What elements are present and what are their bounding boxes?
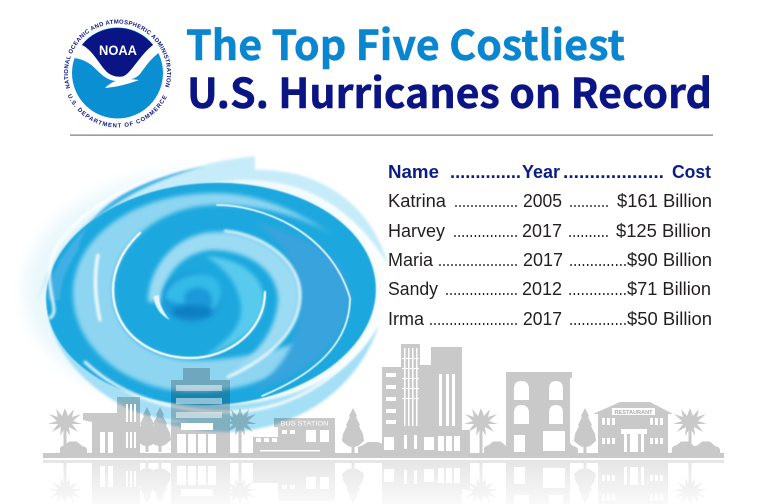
row: Katrina: $161 Billion (617, 191, 712, 211)
row: Sandy: .................. (445, 279, 518, 299)
hurricane swirl (25, 156, 388, 432)
NOAA logo: NOAA (99, 42, 137, 58)
title: The Top Five Costliest (186, 12, 625, 72)
table header: Cost (672, 162, 711, 182)
title: U.S. Hurricanes on Record (187, 60, 712, 120)
divider (70, 134, 713, 136)
row: Maria: Maria (388, 250, 434, 270)
city skyline (43, 344, 724, 458)
row: Sandy: Sandy (388, 279, 438, 299)
skyline windows (100, 348, 663, 453)
swirl eye (154, 273, 222, 323)
row: Harvey (388, 221, 711, 241)
row: Harvey: ................ (453, 221, 518, 241)
swirl: main body (40, 175, 382, 413)
row: Katrina: .......... (569, 191, 609, 211)
NOAA logo (64, 20, 172, 128)
table header: .............. (450, 162, 521, 182)
row: Sandy: .............. (568, 279, 627, 299)
bus station sign: BUS STATION (280, 420, 329, 428)
swirl: soft halo (25, 172, 375, 408)
table header: Year (522, 162, 560, 182)
row: Katrina: ................ (454, 191, 518, 211)
NOAA logo: NATIONAL OCEANIC AND ATMOSPHERIC ADMINISTRATION (64, 20, 172, 89)
row: Harvey: .......... (568, 221, 609, 241)
swirl: outer arms (30, 156, 388, 432)
row: Sandy: $71 Billion (627, 279, 711, 299)
swirl: pale inner band (148, 232, 300, 378)
row: Maria: .............. (569, 250, 627, 270)
row: Irma: 2017 (523, 309, 562, 329)
row: Irma: ...................... (429, 309, 518, 329)
row: Irma: .............. (569, 309, 627, 329)
restaurant sign: RESTAURANT (614, 410, 653, 416)
row: Irma: $50 Billion (627, 309, 712, 329)
skyline reflection (43, 460, 724, 497)
row: Sandy (388, 279, 711, 299)
row: Maria: .................... (438, 250, 518, 270)
row: Katrina (388, 191, 712, 211)
row: Harvey: $125 Billion (616, 221, 711, 241)
row: Maria (388, 250, 712, 270)
row: Katrina: Katrina (388, 191, 447, 211)
NOAA logo: U.S. DEPARTMENT OF COMMERCE (68, 94, 167, 128)
swirl: upper-left rim (47, 166, 205, 300)
row: Sandy: 2012 (522, 279, 562, 299)
swirl: blue right band (250, 222, 350, 392)
title (186, 12, 712, 120)
row: Maria: 2017 (523, 250, 563, 270)
row: Harvey: 2017 (522, 221, 562, 241)
row: Maria: $90 Billion (627, 250, 712, 270)
row: Harvey: Harvey (388, 221, 445, 241)
table header: Name (388, 162, 439, 182)
skyline silhouettes (48, 344, 720, 453)
row: Irma: Irma (388, 309, 425, 329)
swirl: pale outer band (73, 193, 335, 392)
table header (388, 162, 711, 182)
swirl: cyan band (205, 256, 264, 356)
cost table (388, 162, 712, 329)
row: Katrina: 2005 (523, 191, 562, 211)
swirl: white highlights (50, 163, 372, 412)
table header: ................... (563, 162, 664, 182)
row: Irma (388, 309, 712, 329)
